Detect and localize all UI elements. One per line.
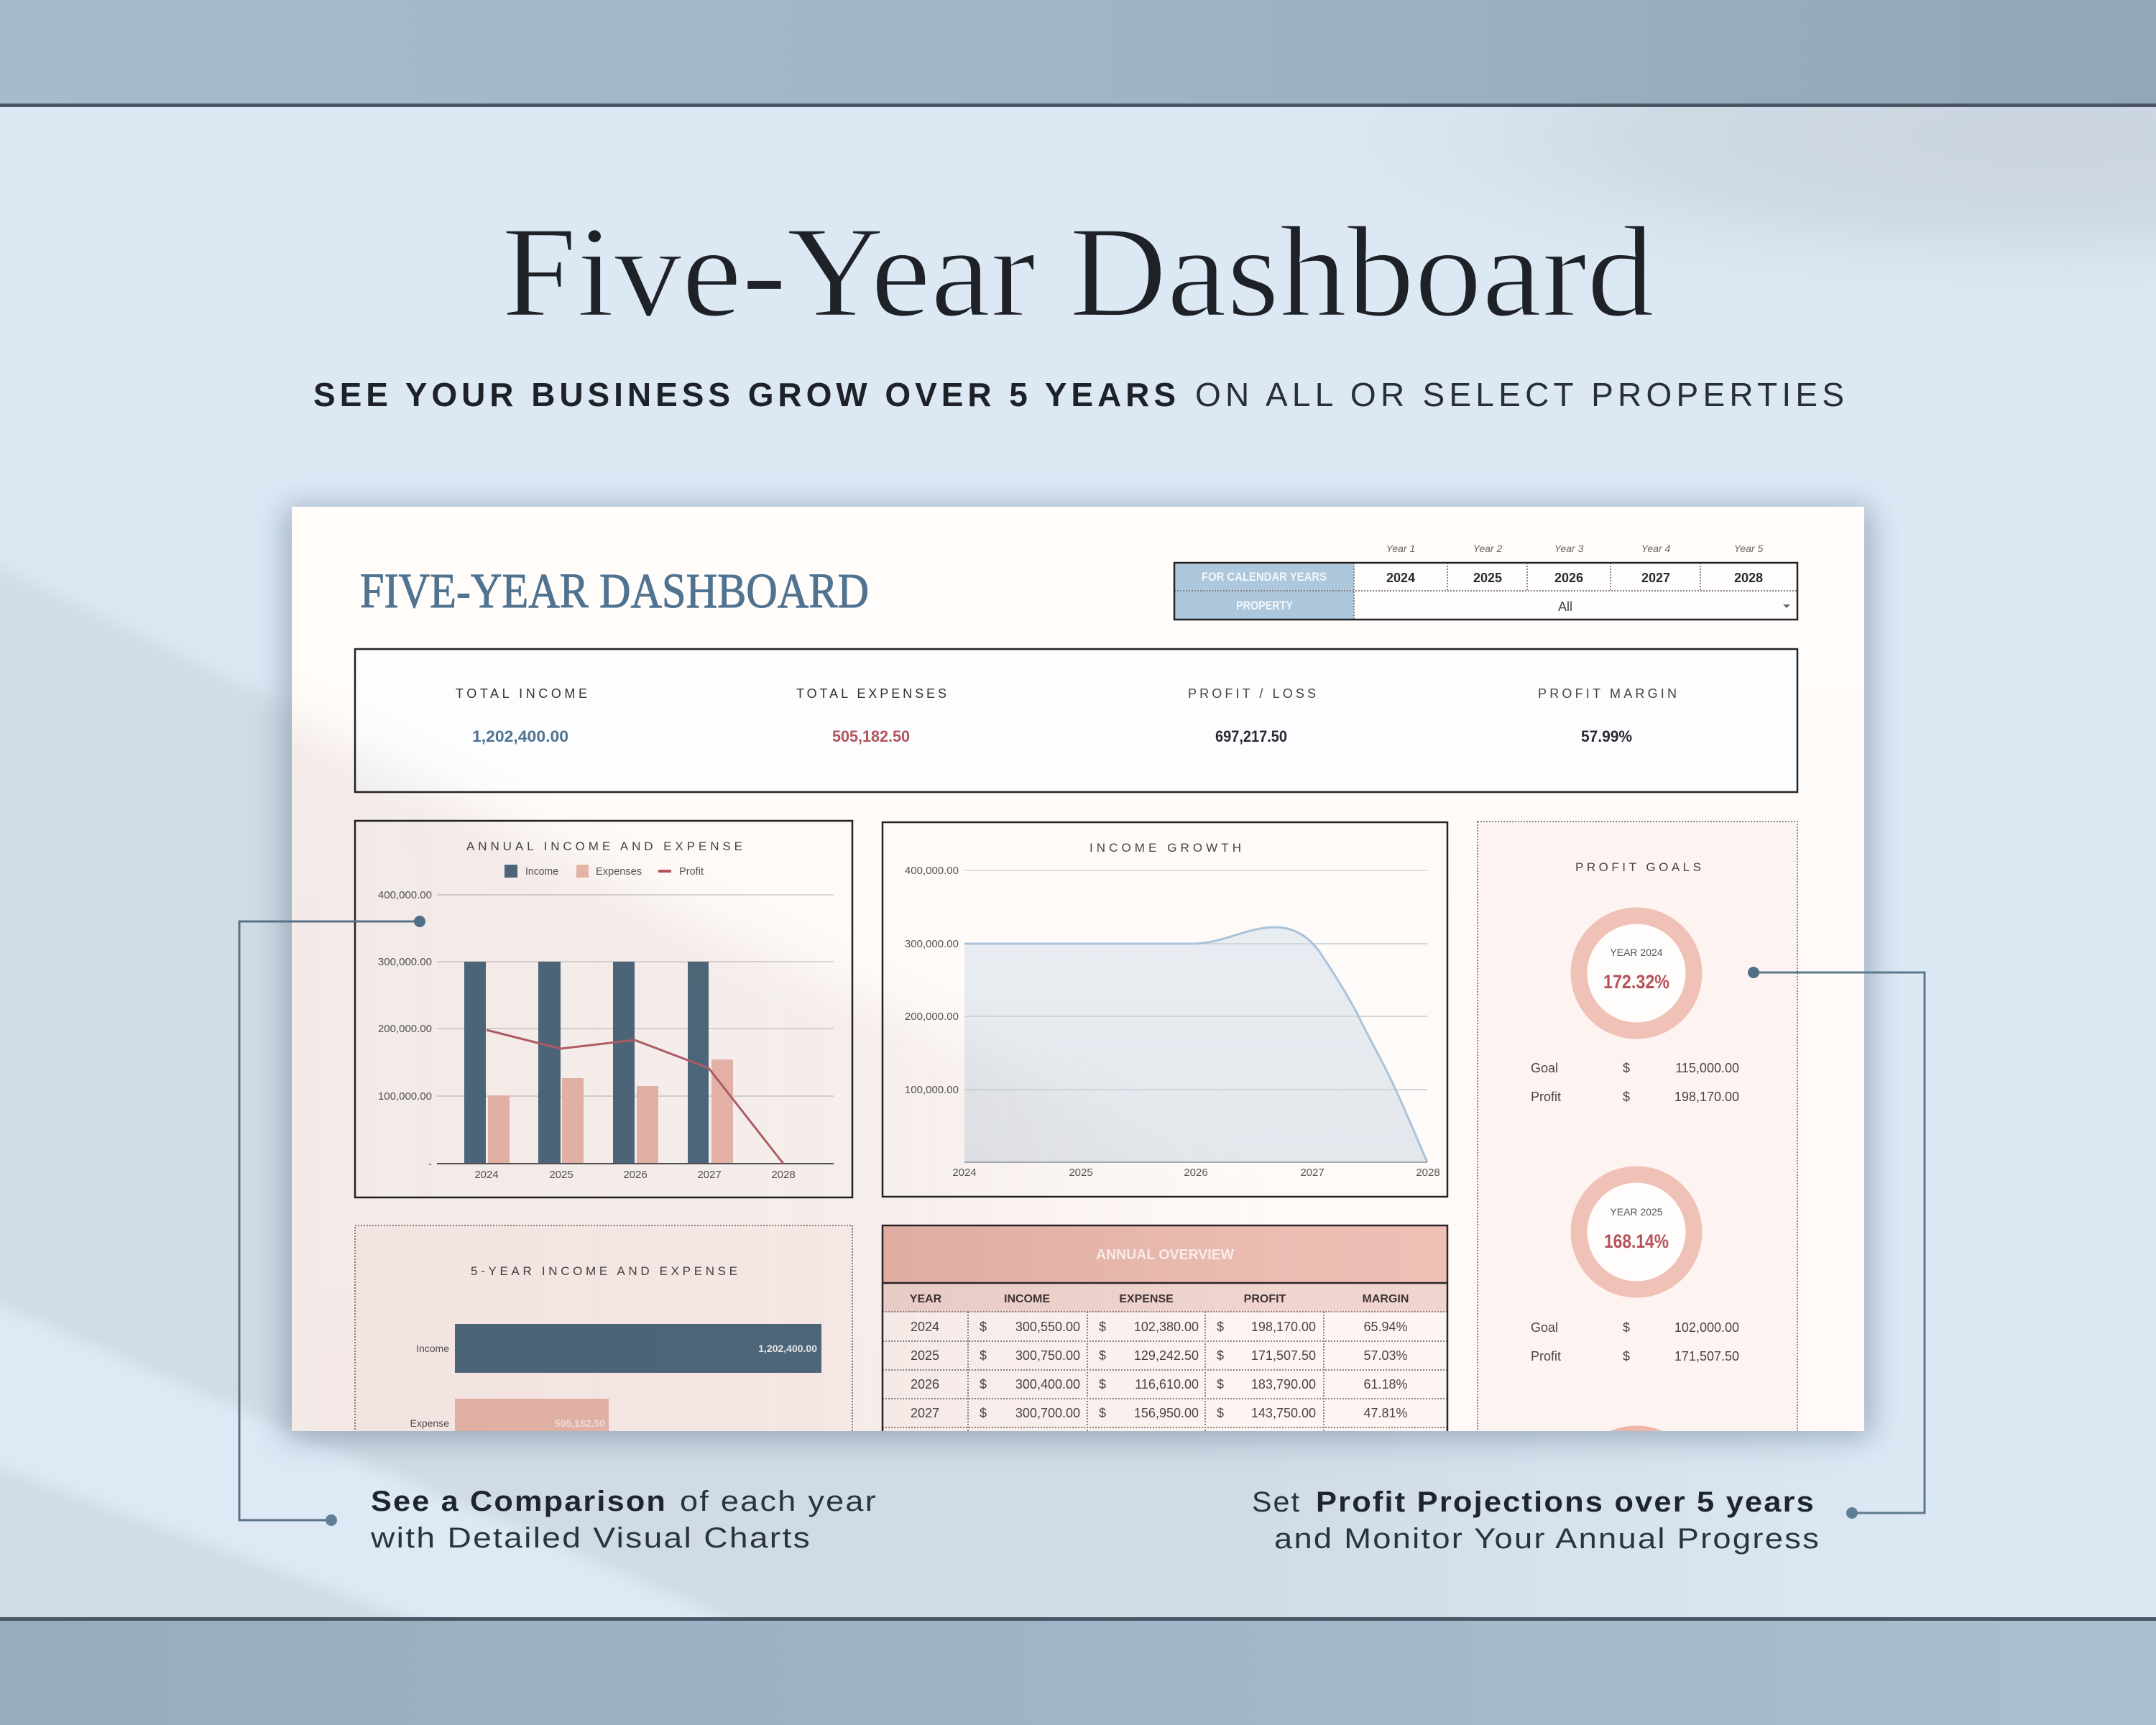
- KPI: profit margin: PROFIT MARGIN: [1538, 686, 1677, 701]
- y axis labels: 300,000.00: [905, 938, 959, 950]
- goal figures 2024: 198,170.00: [1674, 1090, 1739, 1104]
- panel heading: 5-YEAR INCOME AND EXPENSE: [471, 1264, 737, 1278]
- y axis labels: 200,000.00: [378, 1023, 432, 1035]
- donut: year 2024: YEAR 2024: [1610, 947, 1663, 958]
- income bar: [416, 1324, 821, 1373]
- donut: year 2025: 168.14%: [1604, 1230, 1669, 1252]
- caption: comparison: See a Comparison: [371, 1486, 667, 1517]
- KPI: profit / loss: PROFIT / LOSS: [1188, 686, 1316, 701]
- row 2027: 143,750.00: [1251, 1406, 1316, 1420]
- x axis labels: [474, 1169, 796, 1181]
- KPI: total income: [456, 686, 587, 745]
- dashboard heading: FIVE-YEAR DASHBOARD: [360, 564, 869, 618]
- year selector table: Year 5: [1734, 543, 1763, 554]
- row 2026: $: [1099, 1377, 1106, 1392]
- year selector table: Year 1: [1386, 543, 1415, 554]
- profit line: [487, 1030, 783, 1164]
- row 2026: 300,400.00: [1015, 1377, 1080, 1392]
- x axis labels: 2024: [952, 1167, 977, 1179]
- row 2025: 300,750.00: [1015, 1348, 1080, 1363]
- year selector table: 2025: [1473, 571, 1502, 585]
- year selector table: Year 4: [1641, 543, 1670, 554]
- x axis labels: 2026: [623, 1169, 648, 1181]
- table header: [883, 1225, 1447, 1283]
- row 2027: 47.81%: [1363, 1406, 1408, 1420]
- KPI: profit / loss: [1188, 686, 1316, 745]
- row 2026: $: [1217, 1377, 1224, 1392]
- row 2027: $: [1099, 1406, 1106, 1420]
- caption: comparison: with Detailed Visual Charts: [370, 1522, 811, 1554]
- row 2026: 61.18%: [1363, 1377, 1408, 1392]
- goal figures 2024: Goal: [1531, 1061, 1558, 1075]
- year selector table: 2027: [1641, 571, 1670, 585]
- chart title: INCOME GROWTH: [1089, 841, 1241, 855]
- x axis labels: 2025: [1069, 1167, 1093, 1179]
- year selector table: All: [1558, 599, 1572, 614]
- x axis labels: 2028: [1416, 1167, 1440, 1179]
- row 2026: $: [980, 1377, 987, 1392]
- KPI: profit / loss: 697,217.50: [1215, 727, 1287, 745]
- row 2027: 2027: [911, 1406, 939, 1420]
- goal figures 2025: 171,507.50: [1674, 1349, 1739, 1363]
- year selector table: 2026: [1554, 571, 1583, 585]
- y axis labels: 200,000.00: [905, 1011, 959, 1023]
- column headings: PROFIT: [1244, 1293, 1286, 1305]
- y axis labels: 400,000.00: [378, 889, 432, 901]
- KPI: total income: 1,202,400.00: [472, 727, 568, 745]
- x axis labels: 2028: [771, 1169, 796, 1181]
- bottom band: [0, 1617, 2156, 1725]
- KPI: profit margin: [1539, 689, 1676, 742]
- y axis labels: [378, 889, 432, 1170]
- dashboard panel shadow: [285, 507, 1871, 1438]
- goal figures 2025: [1531, 1320, 1739, 1363]
- panel: profit goals: [1478, 822, 1797, 1549]
- y axis labels: -: [428, 1158, 432, 1170]
- KPI: total expenses: TOTAL EXPENSES: [796, 686, 946, 701]
- year selector table: 2028: [1734, 571, 1763, 585]
- column headings: [883, 1283, 1447, 1312]
- expense bars: [488, 1059, 733, 1164]
- y axis labels: [905, 865, 959, 1096]
- column headings: INCOME: [1004, 1293, 1050, 1305]
- expense bar: [410, 1399, 609, 1448]
- top band: [0, 0, 2156, 107]
- y axis labels: 400,000.00: [905, 865, 959, 877]
- row 2025: $: [1099, 1348, 1106, 1363]
- row 2024: 198,170.00: [1251, 1320, 1316, 1334]
- row 2027: $: [980, 1406, 987, 1420]
- chart legend: Expenses: [596, 865, 642, 878]
- subtitle: SEE YOUR BUSINESS GROW OVER 5 YEARS: [313, 376, 1176, 413]
- goal figures 2025: $: [1623, 1349, 1630, 1363]
- x axis labels: 2026: [1184, 1167, 1208, 1179]
- caption: comparison: of each year: [680, 1486, 877, 1517]
- row 2024: 300,550.00: [1015, 1320, 1080, 1334]
- KPI summary box: [355, 649, 1797, 792]
- table: annual overview: [883, 1225, 1447, 1459]
- row 2024: 2024: [911, 1320, 939, 1334]
- chart title: ANNUAL INCOME AND EXPENSE: [466, 840, 742, 853]
- title: Five-Year Dashboard: [502, 201, 1654, 344]
- row 2027: 156,950.00: [1134, 1406, 1199, 1420]
- x axis labels: 2025: [549, 1169, 573, 1181]
- year selector table: FOR CALENDAR YEARS: [1202, 570, 1327, 584]
- x axis labels: 2027: [697, 1169, 722, 1181]
- expense bar: 505,182.50: [555, 1417, 605, 1429]
- y axis labels: 300,000.00: [378, 956, 432, 968]
- goal figures 2025: $: [1623, 1320, 1630, 1335]
- income bar: 1,202,400.00: [758, 1343, 817, 1354]
- income bar: Income: [416, 1343, 449, 1354]
- KPI: profit margin: 57.99%: [1581, 727, 1632, 745]
- row 2025: $: [1217, 1348, 1224, 1363]
- row 2025: 129,242.50: [1134, 1348, 1199, 1363]
- row 2024: 65.94%: [1363, 1320, 1408, 1334]
- donut: year 2025: YEAR 2025: [1610, 1206, 1663, 1218]
- chart legend: Income: [525, 865, 558, 878]
- x axis labels: 2024: [474, 1169, 499, 1181]
- year selector table: PROPERTY: [1236, 599, 1294, 612]
- row 2024: $: [1099, 1320, 1106, 1334]
- goal figures 2024: Profit: [1531, 1090, 1561, 1104]
- row 2024: [911, 1320, 1408, 1334]
- goal figures 2024: $: [1623, 1061, 1630, 1075]
- row 2024: $: [980, 1320, 987, 1334]
- row 2024: $: [1217, 1320, 1224, 1334]
- row 2027: [911, 1406, 1408, 1420]
- KPI: total expenses: [796, 686, 946, 745]
- caption: profit projections: [1252, 1486, 1820, 1555]
- column headings: YEAR: [910, 1293, 942, 1305]
- chart panel: annual income and expense: [355, 821, 852, 1197]
- row 2025: 57.03%: [1363, 1348, 1408, 1363]
- row 2025: [911, 1348, 1408, 1363]
- row 2027: $: [1217, 1406, 1224, 1420]
- subtitle: ON ALL OR SELECT PROPERTIES: [1195, 376, 1844, 413]
- panel heading: PROFIT GOALS: [1575, 860, 1701, 874]
- caption: profit projections: Profit Projections over 5 years: [1316, 1486, 1815, 1518]
- chart legend: [505, 865, 704, 878]
- year selector table: [1174, 543, 1797, 620]
- row 2026: 183,790.00: [1251, 1377, 1316, 1392]
- row 2025: $: [980, 1348, 987, 1363]
- donut: year 2026 (cropped): [1579, 1434, 1694, 1549]
- callout connector: profit goals: [1748, 967, 1925, 1519]
- goal figures 2024: 115,000.00: [1675, 1061, 1739, 1075]
- donut: year 2024: 172.32%: [1603, 971, 1669, 993]
- y axis labels: 100,000.00: [378, 1090, 432, 1103]
- row 2027: 300,700.00: [1015, 1406, 1080, 1420]
- goal figures 2025: Goal: [1531, 1320, 1558, 1335]
- year selector table: Year 3: [1554, 543, 1583, 554]
- donut: year 2024: [1579, 916, 1694, 1031]
- KPI: total income: TOTAL INCOME: [456, 686, 587, 701]
- row 2026: 2026: [911, 1377, 939, 1392]
- row 2025: 171,507.50: [1251, 1348, 1316, 1363]
- row 2026: [911, 1377, 1408, 1392]
- caption: profit projections: and Monitor Your Annual Progress: [1274, 1523, 1820, 1555]
- KPI: total expenses: 505,182.50: [832, 727, 910, 745]
- goal figures 2025: 102,000.00: [1674, 1320, 1739, 1335]
- donut: year 2025: [1579, 1174, 1694, 1289]
- column headings: EXPENSE: [1119, 1293, 1174, 1305]
- subtitle: [313, 376, 1844, 413]
- area curve: [964, 927, 1427, 1162]
- goal figures 2024: [1531, 1061, 1739, 1104]
- year selector table: Year 2: [1473, 543, 1502, 554]
- dashboard panel: [292, 507, 1864, 1431]
- row 2026: 116,610.00: [1135, 1377, 1199, 1392]
- x axis labels: [952, 1167, 1440, 1179]
- chart legend: Profit: [679, 865, 704, 878]
- table header: ANNUAL OVERVIEW: [1096, 1247, 1234, 1263]
- goal figures 2025: Profit: [1531, 1349, 1561, 1363]
- income bars: [464, 962, 709, 1164]
- row 2024: 102,380.00: [1134, 1320, 1199, 1334]
- chart panel: income growth: [883, 822, 1447, 1197]
- caption: profit projections: Set: [1252, 1486, 1301, 1518]
- row 2025: 2025: [911, 1348, 939, 1363]
- x axis labels: 2027: [1300, 1167, 1325, 1179]
- y axis labels: 100,000.00: [905, 1084, 959, 1096]
- goal figures 2024: $: [1623, 1090, 1630, 1104]
- year selector table: 2024: [1386, 571, 1415, 585]
- caption: comparison: [370, 1486, 877, 1554]
- expense bar: Expense: [410, 1417, 449, 1429]
- panel: 5-year income and expense: [355, 1225, 852, 1470]
- callout connector: charts: [239, 916, 425, 1526]
- column headings: MARGIN: [1363, 1293, 1409, 1305]
